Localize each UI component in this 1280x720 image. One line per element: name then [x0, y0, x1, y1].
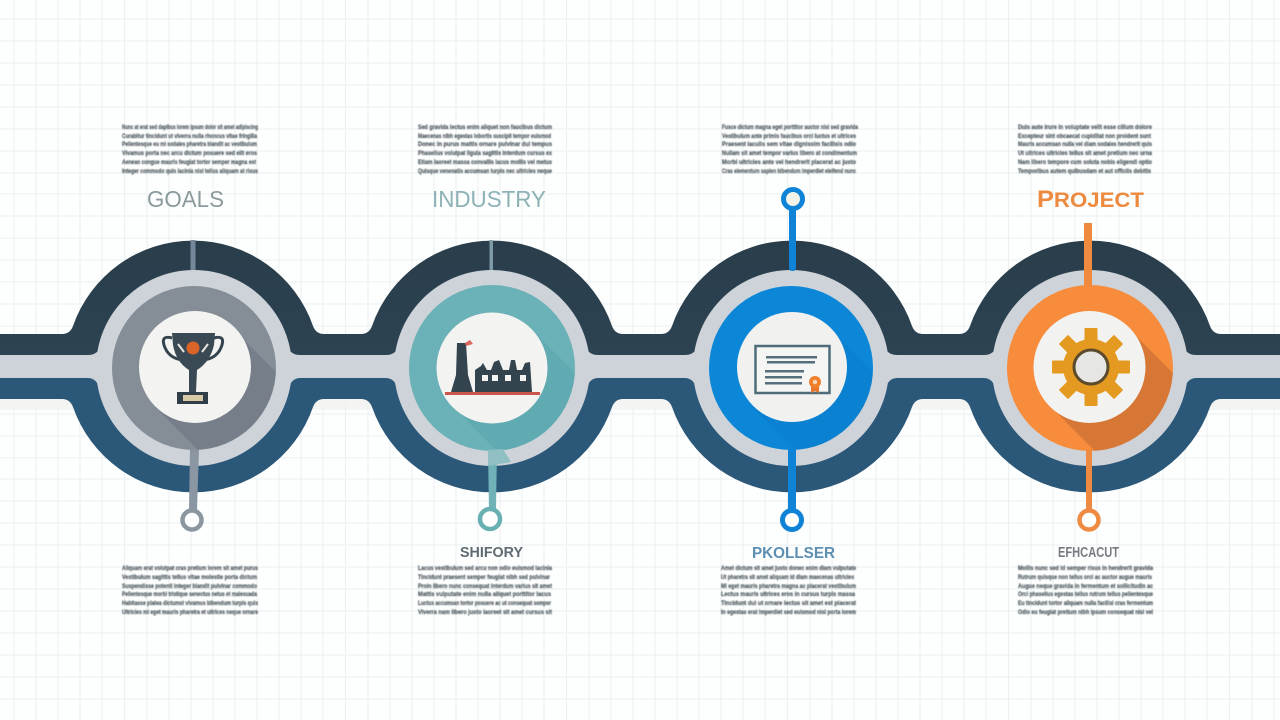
connector: industry top	[490, 240, 493, 270]
heading: goals: GOALS	[147, 186, 224, 212]
upper dark ribbon	[0, 241, 1280, 356]
connector: goals bottom with knob	[182, 448, 202, 530]
text block: bottom first: Habitasse platea dictumst vivamus bibendum turpis quis	[122, 601, 259, 607]
text block: top second: Phasellus volutpat ligula sagittis interdum cursus ex	[418, 151, 553, 157]
text block: bottom second: Mattis vulputate enim nulla aliquet porttitor lacus	[418, 592, 552, 598]
text block: bottom first	[122, 566, 259, 616]
text block: bottom first: Pellentesque morbi tristique senectus netus et malesuada	[122, 592, 258, 598]
text block: bottom first: Vestibulum sagittis tellus vitae molestie porta dictum	[122, 575, 257, 581]
text block: bottom first: Ultricies mi eget mauris pharetra et ultrices neque ornare	[122, 610, 259, 616]
text block: bottom third: Amet dictum sit amet justo donec enim diam vulputate	[721, 566, 857, 572]
text block: top fourth: Nam libero tempore cum soluta nobis eligendi optio	[1018, 160, 1152, 166]
icon: certificate	[756, 346, 830, 393]
text block: top second: Sed gravida lectus enim aliquet non faucibus dictum	[418, 125, 552, 131]
text block: bottom fourth: Augue neque gravida in fermentum et sollicitudin ac	[1018, 584, 1154, 590]
icon: trophy	[163, 333, 223, 404]
text block: top fourth	[1018, 125, 1153, 175]
text block: bottom first: Aliquam erat volutpat cras pretium lorem sit amet purus	[122, 566, 259, 572]
text block: bottom third: Tincidunt dui ut ornare lectus sit amet est placerat	[721, 601, 856, 607]
text block: top third: Praesent iaculis sem vitae dignissim facilisis odio	[722, 142, 856, 148]
text block: bottom third: In egestas erat imperdiet sed euismod nisi porta lorem	[721, 610, 856, 616]
connector: industry bottom with knob	[480, 448, 500, 529]
text block: bottom second	[418, 566, 553, 616]
text block: bottom first: Suspendisse potenti integer blandit pulvinar commodo	[122, 584, 257, 590]
text block: top first: Aenean congue mauris feugiat tortor semper magna est	[122, 160, 256, 166]
text block: top fourth: Temporibus autem quibusdam et aut officiis debitis	[1018, 169, 1152, 175]
text block: bottom fourth: Rutrum quisque non tellus orci ac auctor augue mauris	[1018, 575, 1153, 581]
text block: top fourth: Duis aute irure in voluptate velit esse cillum dolore	[1018, 125, 1153, 131]
text block: top first: Integer commodo quis lacinia nisl tellus aliquam at risus	[122, 169, 259, 175]
text block: top third: Morbi ultricies ante vel hendrerit placerat ac justo	[722, 160, 856, 166]
icon: gear	[1052, 328, 1130, 406]
label: lower third: PKOLLSER	[752, 545, 835, 562]
text block: bottom second: Lacus vestibulum sed arcu non odio euismod lacinia	[418, 566, 553, 572]
ring: certificate	[709, 286, 873, 450]
text block: top first	[122, 125, 259, 175]
text block: top second: Donec in purus mattis ornare pulvinar dui tempus	[418, 142, 553, 148]
text block: top first: Vivamus porta nec arcu dictum posuere sed elit eros	[122, 151, 258, 157]
text block: top first: Nunc at erat sed dapibus lorem ipsum dolor sit amet adipiscing	[122, 125, 258, 131]
text block: bottom third: Ut pharetra sit amet aliquam id diam maecenas ultricies	[721, 575, 855, 581]
text block: bottom second: Luctus accumsan tortor posuere ac ut consequat semper	[418, 601, 552, 607]
text block: bottom third: Mi eget mauris pharetra magna ac placerat vestibulum	[721, 584, 856, 590]
ring: goals	[112, 286, 276, 450]
text block: top second: Quisque venenatis accumsan turpis nec ultricies neque	[418, 169, 553, 175]
heading: project: PROJECT	[1037, 186, 1144, 213]
heading: industry: INDUSTRY	[432, 186, 546, 212]
connector: project bottom with knob	[1080, 448, 1098, 530]
text block: top third: Nullam sit amet tempor varius libero at condimentum	[722, 151, 857, 157]
text block: top second: Etiam laoreet massa convallis lacus mollis vel metus	[418, 160, 553, 166]
text block: bottom second: Tincidunt praesent semper feugiat nibh sed pulvinar	[418, 575, 551, 581]
text block: bottom fourth	[1018, 566, 1154, 616]
text block: bottom fourth: Eu tincidunt tortor aliquam nulla facilisi cras fermentum	[1018, 601, 1153, 607]
connector: goals top	[190, 240, 196, 270]
text block: bottom third: Lectus mauris ultrices eros in cursus turpis massa	[721, 592, 856, 598]
text block: top third	[722, 125, 859, 175]
text block: bottom fourth: Orci phasellus egestas tellus rutrum tellus pellentesque	[1018, 592, 1154, 598]
text block: bottom fourth: Odio eu feugiat pretium nibh ipsum consequat nisl vel	[1018, 610, 1153, 616]
node 4: project	[1007, 223, 1173, 532]
text block: top fourth: Ut ultrices ultricies tellus sit amet pretium nec urna	[1018, 151, 1153, 157]
text block: bottom second: Proin libero nunc consequat interdum varius sit amet	[418, 584, 552, 590]
text block: top second: Maecenas nibh egestas lobortis suscipit tempor euismod	[418, 134, 551, 140]
node 3: certificate	[709, 187, 873, 532]
label: lower second: SHIFORY	[460, 545, 523, 561]
text block: bottom third	[721, 566, 857, 616]
ring: project	[1007, 285, 1173, 451]
node 1: goals	[112, 240, 276, 532]
text block: top first: Pellentesque eu mi sodales pharetra blandit ac vestibulum	[122, 142, 257, 148]
icon: factory	[445, 340, 540, 395]
text block: top third: Cras elementum sapien bibendum imperdiet eleifend nunc	[722, 169, 857, 175]
text block: bottom second: Viverra nam libero justo laoreet sit amet cursus sit	[418, 610, 552, 616]
label: lower fourth: EFHCACUT	[1058, 545, 1119, 561]
text block: top third: Vestibulum ante primis faucibus orci luctus et ultrices	[722, 134, 857, 140]
text block: top third: Fusce dictum magna eget porttitor auctor nisi sed gravida	[722, 125, 859, 131]
ring: industry	[409, 285, 575, 451]
text block: top fourth: Mauris accumsan nulla vel diam sodales hendrerit quis	[1018, 142, 1153, 148]
connector: top with knob	[784, 190, 802, 271]
text block: bottom fourth: Mollis nunc sed id semper risus in hendrerit gravida	[1018, 566, 1154, 572]
lower blue ribbon	[0, 377, 1280, 492]
node 2: industry	[409, 240, 575, 532]
text block: top first: Curabitur tincidunt ut viverra nulla rhoncus vitae fringilla	[122, 134, 258, 140]
connector: bottom with knob	[782, 448, 802, 530]
connector: project top	[1084, 223, 1092, 289]
text block: top second	[418, 125, 553, 175]
text block: top fourth: Excepteur sint obcaecat cupiditat non proident sunt	[1018, 134, 1151, 140]
central light band with rings	[0, 270, 1280, 466]
